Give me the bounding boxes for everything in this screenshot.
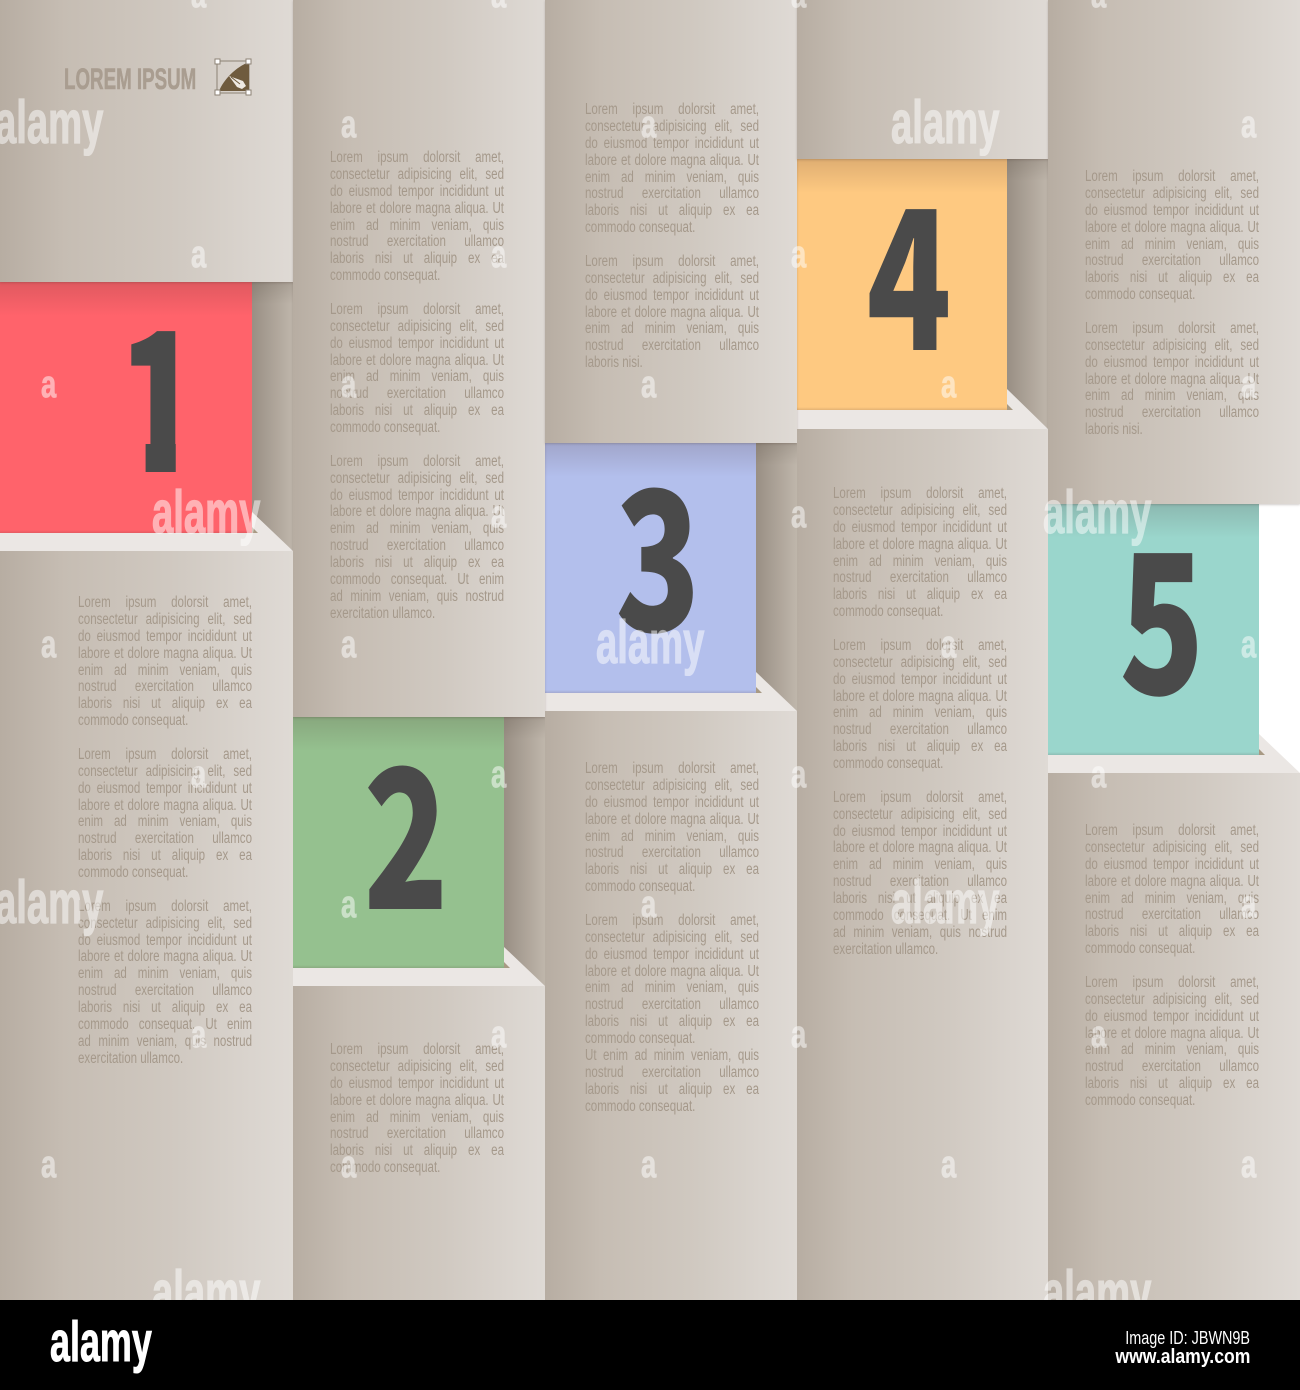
text block: column 3 bottom: do eiusmod tempor incididunt ut bbox=[585, 946, 759, 963]
text block: column 1 bottom: enim ad minim veniam, quis bbox=[78, 965, 252, 982]
image id: Image ID: JBWN9B bbox=[1125, 1328, 1250, 1348]
panel: column 1 bottom bbox=[0, 551, 293, 1300]
text block: column 5 top: commodo consequat. bbox=[1085, 286, 1195, 303]
text block: column 3 top: consectetur adipisicing elit, sed bbox=[585, 270, 759, 287]
watermarks: repeated alamy marks: a bbox=[191, 754, 206, 796]
text block: column 2 top: enim ad minim veniam, quis bbox=[330, 216, 504, 234]
watermarks: repeated alamy marks: alamy bbox=[891, 89, 999, 156]
text block: column 1 bottom: Lorem ipsum dolorsit amet, bbox=[78, 898, 252, 915]
text block: column 2 top: enim ad minim veniam, quis bbox=[330, 520, 504, 537]
text block: column 3 bottom: Ut enim ad minim veniam, quis bbox=[585, 1047, 759, 1064]
text block: column 5 bottom: nostrud exercitation ullamco bbox=[1085, 906, 1259, 923]
logo text: LOREM IPSUM bbox=[64, 63, 196, 96]
watermarks: repeated alamy marks: a bbox=[791, 494, 806, 536]
text block: column 4 bottom: Lorem ipsum dolorsit amet, bbox=[833, 789, 1007, 806]
watermarks: repeated alamy marks: alamy bbox=[891, 869, 999, 936]
square 1: red number tile bbox=[0, 282, 252, 533]
text block: column 1 bottom: consectetur adipisicing elit, sed bbox=[78, 915, 252, 932]
text block: column 2 top: commodo consequat. bbox=[330, 419, 440, 436]
text block: column 4 bottom: labore et dolore magna aliqua. Ut bbox=[833, 688, 1007, 704]
text block: column 2 bottom: commodo consequat. bbox=[330, 1159, 440, 1176]
text block: column 1 bottom: enim ad minim veniam, quis bbox=[78, 662, 252, 678]
text block: column 5 top: consectetur adipisicing elit, sed bbox=[1085, 337, 1259, 354]
text block: column 5 bottom: do eiusmod tempor incididunt ut bbox=[1085, 856, 1259, 873]
text block: column 2 top: nostrud exercitation ullamco bbox=[330, 537, 504, 554]
text block: column 3 bottom: laboris nisi ut aliquip ex ea bbox=[585, 1081, 759, 1098]
back strip: column 2 bbox=[504, 717, 545, 987]
text block: column 4 bottom: consectetur adipisicing elit, sed bbox=[833, 654, 1007, 671]
text block: column 4 bottom: enim ad minim veniam, quis bbox=[833, 552, 1007, 570]
text block: column 5 bottom: enim ad minim veniam, quis bbox=[1085, 1041, 1259, 1058]
text block: column 3 top: consectetur adipisicing elit, sed bbox=[585, 118, 759, 135]
text block: column 3 top: laboris nisi ut aliquip ex ea bbox=[585, 202, 759, 219]
text block: column 3 top: commodo consequat. bbox=[585, 219, 695, 236]
text block: column 5 top: laboris nisi. bbox=[1085, 421, 1143, 438]
text block: column 4 bottom: commodo consequat. bbox=[833, 603, 943, 620]
text block: column 4 bottom: Lorem ipsum dolorsit amet, bbox=[833, 637, 1007, 654]
square 4: orange number tile bbox=[797, 159, 1007, 410]
text block: column 5 top: laboris nisi ut aliquip ex ea bbox=[1085, 269, 1259, 286]
watermarks: repeated alamy marks: a bbox=[791, 754, 806, 796]
text block: column 3 bottom: enim ad minim veniam, quis bbox=[585, 979, 759, 996]
text block: column 2 bottom: enim ad minim veniam, quis bbox=[330, 1108, 504, 1126]
text block: column 2 top: enim ad minim veniam, quis bbox=[330, 368, 504, 385]
text block: column 1 bottom: laboris nisi ut aliquip ex ea bbox=[78, 847, 252, 864]
text block: column 5 top: nostrud exercitation ullamco bbox=[1085, 252, 1259, 269]
watermarks: repeated alamy marks: a bbox=[341, 624, 356, 666]
watermarks: repeated alamy marks: alamy bbox=[1043, 479, 1151, 546]
text block: column 5 bottom: nostrud exercitation ullamco bbox=[1085, 1058, 1259, 1075]
text block: column 4 bottom: labore et dolore magna aliqua. Ut bbox=[833, 536, 1007, 553]
watermarks: repeated alamy marks: a bbox=[1241, 884, 1256, 926]
watermarks: repeated alamy marks: a bbox=[641, 1144, 656, 1186]
panel: column 5 bottom bbox=[1048, 773, 1300, 1300]
panel: column 3 top bbox=[545, 0, 797, 443]
text block: column 2 top: commodo consequat. Ut enim bbox=[330, 571, 504, 588]
watermarks: repeated alamy marks: a bbox=[1091, 754, 1106, 796]
watermarks: repeated alamy marks: a bbox=[641, 884, 656, 926]
text block: column 3 bottom: nostrud exercitation ullamco bbox=[585, 1064, 759, 1081]
text block: column 3 bottom: Lorem ipsum dolorsit amet, bbox=[585, 912, 759, 929]
back strip: column 4 bbox=[1007, 159, 1048, 429]
back strip: column 3 bbox=[756, 443, 797, 713]
website: www.alamy.com bbox=[1115, 1346, 1250, 1368]
text block: column 2 top: labore et dolore magna aliqua. Ut bbox=[330, 352, 504, 368]
watermarks: repeated alamy marks: alamy bbox=[596, 609, 704, 676]
text block: column 3 bottom: nostrud exercitation ullamco bbox=[585, 996, 759, 1013]
text block: column 1 bottom: labore et dolore magna aliqua. Ut bbox=[78, 948, 252, 965]
text block: column 5 top: enim ad minim veniam, quis bbox=[1085, 236, 1259, 252]
text block: column 4 bottom: laboris nisi ut aliquip ex ea bbox=[833, 586, 1007, 603]
text block: column 4 bottom: labore et dolore magna aliqua. Ut bbox=[833, 839, 1007, 856]
text block: column 3 bottom: commodo consequat. bbox=[585, 1098, 695, 1114]
icon: pen nib in selection box bbox=[214, 58, 252, 96]
text block: column 5 top: do eiusmod tempor incididunt ut bbox=[1085, 354, 1259, 371]
text block: column 3 bottom: commodo consequat. bbox=[585, 878, 695, 895]
watermarks: repeated alamy marks: a bbox=[941, 1144, 956, 1186]
text block: column 3 bottom: do eiusmod tempor incididunt ut bbox=[585, 794, 759, 811]
panel: column 2 top bbox=[293, 0, 545, 717]
text block: column 5 top: consectetur adipisicing elit, sed bbox=[1085, 185, 1259, 202]
text block: column 5 bottom: labore et dolore magna aliqua. Ut bbox=[1085, 873, 1259, 890]
text block: column 4 bottom: consectetur adipisicing elit, sed bbox=[833, 806, 1007, 823]
text block: column 3 top: Lorem ipsum dolorsit amet, bbox=[585, 253, 759, 270]
text block: column 3 bottom: laboris nisi ut aliquip ex ea bbox=[585, 1013, 759, 1030]
text block: column 5 bottom: consectetur adipisicing elit, sed bbox=[1085, 839, 1259, 856]
text block: column 2 bottom: nostrud exercitation ullamco bbox=[330, 1125, 504, 1142]
watermarks: repeated alamy marks: a bbox=[791, 234, 806, 276]
text block: column 1 bottom: commodo consequat. Ut enim bbox=[78, 1016, 252, 1033]
text block: column 5 top: labore et dolore magna aliqua. Ut bbox=[1085, 219, 1259, 236]
text block: column 3 top: enim ad minim veniam, quis bbox=[585, 320, 759, 337]
panel: column 5 top bbox=[1048, 0, 1300, 504]
text block: column 2 top: nostrud exercitation ullamco bbox=[330, 385, 504, 402]
watermarks: repeated alamy marks: a bbox=[41, 1144, 56, 1186]
text block: column 4 bottom: do eiusmod tempor incididunt ut bbox=[833, 671, 1007, 688]
text block: column 4 bottom: Lorem ipsum dolorsit amet, bbox=[833, 485, 1007, 502]
square 2: green number tile bbox=[293, 717, 504, 968]
text block: column 3 bottom: labore et dolore magna aliqua. Ut bbox=[585, 962, 759, 980]
watermarks: repeated alamy marks: a bbox=[491, 234, 506, 276]
watermarks: repeated alamy marks: a bbox=[941, 364, 956, 406]
text block: column 4 bottom: nostrud exercitation ullamco bbox=[833, 721, 1007, 738]
text block: column 5 bottom: do eiusmod tempor incididunt ut bbox=[1085, 1008, 1259, 1025]
text block: column 3 top: enim ad minim veniam, quis bbox=[585, 168, 759, 186]
text block: column 3 top: laboris nisi. bbox=[585, 354, 643, 371]
text block: column 1 bottom: Lorem ipsum dolorsit amet, bbox=[78, 594, 252, 611]
text block: column 5 bottom: laboris nisi ut aliquip ex ea bbox=[1085, 923, 1259, 940]
text block: column 1 bottom: consectetur adipisicing elit, sed bbox=[78, 763, 252, 780]
text block: column 1 bottom: nostrud exercitation ullamco bbox=[78, 678, 252, 695]
watermarks: repeated alamy marks: a bbox=[341, 1144, 356, 1186]
text block: column 3 bottom bbox=[585, 760, 759, 1114]
panel: column 4 bottom bbox=[797, 429, 1048, 1300]
text block: column 1 bottom: commodo consequat. bbox=[78, 712, 188, 729]
text block: column 4 bottom: commodo consequat. Ut enim bbox=[833, 907, 1007, 924]
text block: column 2 top: consectetur adipisicing elit, sed bbox=[330, 166, 504, 183]
text block: column 1 bottom: Lorem ipsum dolorsit amet, bbox=[78, 746, 252, 763]
text block: column 5 top: enim ad minim veniam, quis bbox=[1085, 387, 1259, 404]
text block: column 5 bottom: labore et dolore magna aliqua. Ut bbox=[1085, 1024, 1259, 1042]
text block: column 2 bottom: labore et dolore magna aliqua. Ut bbox=[330, 1092, 504, 1109]
text block: column 3 bottom: enim ad minim veniam, quis bbox=[585, 828, 759, 844]
watermarks: repeated alamy marks: a bbox=[191, 1014, 206, 1056]
text block: column 2 top: labore et dolore magna aliqua. Ut bbox=[330, 503, 504, 520]
text block: column 1 bottom: laboris nisi ut aliquip ex ea bbox=[78, 695, 252, 712]
text block: column 4 bottom: commodo consequat. bbox=[833, 755, 943, 772]
text block: column 3 top: Lorem ipsum dolorsit amet, bbox=[585, 101, 759, 118]
text block: column 5 top: nostrud exercitation ullamco bbox=[1085, 404, 1259, 421]
text block: column 1 bottom: commodo consequat. bbox=[78, 864, 188, 881]
text block: column 2 top: labore et dolore magna aliqua. Ut bbox=[330, 200, 504, 217]
text block: column 1 bottom: laboris nisi ut aliquip ex ea bbox=[78, 999, 252, 1016]
watermarks: repeated alamy marks: a bbox=[341, 364, 356, 406]
text block: column 5 bottom: Lorem ipsum dolorsit amet, bbox=[1085, 974, 1259, 991]
text block: column 2 bottom: do eiusmod tempor incididunt ut bbox=[330, 1075, 504, 1092]
text block: column 2 top: laboris nisi ut aliquip ex ea bbox=[330, 402, 504, 419]
text block: column 2 top: Lorem ipsum dolorsit amet, bbox=[330, 301, 504, 318]
text block: column 2 bottom: consectetur adipisicing elit, sed bbox=[330, 1058, 504, 1075]
watermarks: repeated alamy marks: a bbox=[491, 1014, 506, 1056]
text block: column 2 top: ad minim veniam, quis nostrud bbox=[330, 588, 504, 605]
watermarks: repeated alamy marks: alamy bbox=[152, 479, 260, 546]
text block: column 3 bottom: labore et dolore magna aliqua. Ut bbox=[585, 811, 759, 828]
text block: column 3 top: labore et dolore magna aliqua. Ut bbox=[585, 152, 759, 169]
text block: column 2 top: do eiusmod tempor incididunt ut bbox=[330, 335, 504, 352]
text block: column 4 bottom bbox=[833, 485, 1007, 958]
watermarks: repeated alamy marks: a bbox=[41, 624, 56, 666]
watermarks: repeated alamy marks: a bbox=[1241, 624, 1256, 666]
text block: column 5 top: labore et dolore magna aliqua. Ut bbox=[1085, 370, 1259, 388]
text block: column 2 top: nostrud exercitation ullamco bbox=[330, 233, 504, 250]
text block: column 1 bottom: labore et dolore magna aliqua. Ut bbox=[78, 796, 252, 814]
text block: column 5 bottom: consectetur adipisicing elit, sed bbox=[1085, 991, 1259, 1008]
watermarks: repeated alamy marks: a bbox=[491, 754, 506, 796]
text block: column 3 top: nostrud exercitation ullamco bbox=[585, 337, 759, 354]
text block: column 4 bottom: nostrud exercitation ullamco bbox=[833, 569, 1007, 586]
text block: column 2 bottom: laboris nisi ut aliquip ex ea bbox=[330, 1142, 504, 1159]
text block: column 4 bottom: enim ad minim veniam, quis bbox=[833, 856, 1007, 873]
text block: column 1 bottom: exercitation ullamco. bbox=[78, 1050, 183, 1067]
text block: column 2 top: consectetur adipisicing elit, sed bbox=[330, 470, 504, 487]
panel: column 4 top bbox=[797, 0, 1048, 159]
text block: column 2 top: Lorem ipsum dolorsit amet, bbox=[330, 149, 504, 166]
text block: column 1 bottom: do eiusmod tempor incididunt ut bbox=[78, 932, 252, 948]
text block: column 3 bottom: consectetur adipisicing elit, sed bbox=[585, 777, 759, 794]
text block: column 4 bottom: do eiusmod tempor incididunt ut bbox=[833, 822, 1007, 840]
watermarks: repeated alamy marks: a bbox=[41, 364, 56, 406]
text block: column 5 top: do eiusmod tempor incididunt ut bbox=[1085, 202, 1259, 219]
text block: column 4 bottom: exercitation ullamco. bbox=[833, 941, 938, 958]
text block: column 4 bottom: laboris nisi ut aliquip ex ea bbox=[833, 890, 1007, 907]
text block: column 3 bottom: laboris nisi ut aliquip ex ea bbox=[585, 861, 759, 878]
text block: column 1 bottom: enim ad minim veniam, quis bbox=[78, 813, 252, 830]
watermarks: repeated alamy marks: a bbox=[341, 104, 356, 146]
text block: column 5 bottom: commodo consequat. bbox=[1085, 1092, 1195, 1109]
panel: column 1 top with logo bbox=[0, 0, 293, 282]
watermarks: repeated alamy marks: a bbox=[341, 884, 356, 926]
text block: column 5 bottom: Lorem ipsum dolorsit amet, bbox=[1085, 822, 1259, 839]
text block: column 1 bottom: do eiusmod tempor incididunt ut bbox=[78, 628, 252, 645]
text block: column 1 bottom: nostrud exercitation ullamco bbox=[78, 982, 252, 999]
footer bar bbox=[0, 1300, 1300, 1390]
text block: column 3 top bbox=[585, 101, 759, 371]
text block: column 2 top: do eiusmod tempor incididunt ut bbox=[330, 183, 504, 200]
watermarks: repeated alamy marks: a bbox=[641, 104, 656, 146]
watermarks: repeated alamy marks: a bbox=[191, 234, 206, 276]
text block: column 3 top: nostrud exercitation ullamco bbox=[585, 185, 759, 202]
text block: column 3 bottom: commodo consequat. bbox=[585, 1030, 695, 1047]
text block: column 3 bottom: Lorem ipsum dolorsit amet, bbox=[585, 760, 759, 777]
footer logo: alamy bbox=[50, 1310, 152, 1374]
text block: column 1 bottom: consectetur adipisicing elit, sed bbox=[78, 611, 252, 628]
text block: column 5 top: Lorem ipsum dolorsit amet, bbox=[1085, 320, 1259, 337]
panel: column 2 bottom bbox=[293, 986, 545, 1300]
text block: column 5 bottom bbox=[1085, 822, 1259, 1109]
text block: column 4 bottom: nostrud exercitation ullamco bbox=[833, 873, 1007, 890]
text block: column 3 top: labore et dolore magna aliqua. Ut bbox=[585, 304, 759, 320]
text block: column 2 top: laboris nisi ut aliquip ex ea bbox=[330, 250, 504, 267]
text block: column 4 bottom: do eiusmod tempor incididunt ut bbox=[833, 519, 1007, 536]
watermarks: repeated alamy marks: a bbox=[1241, 1144, 1256, 1186]
text block: column 5 bottom: commodo consequat. bbox=[1085, 940, 1195, 957]
watermarks: repeated alamy marks: a bbox=[791, 1014, 806, 1056]
text block: column 3 top: do eiusmod tempor incididunt ut bbox=[585, 135, 759, 152]
text block: column 2 top: commodo consequat. bbox=[330, 267, 440, 284]
watermarks: repeated alamy marks: a bbox=[641, 364, 656, 406]
square 5: teal number tile bbox=[1048, 504, 1259, 755]
text block: column 2 bottom bbox=[330, 1041, 504, 1176]
text block: column 5 bottom: laboris nisi ut aliquip ex ea bbox=[1085, 1075, 1259, 1092]
panel: column 3 bottom bbox=[545, 711, 797, 1300]
text block: column 4 bottom: ad minim veniam, quis nostrud bbox=[833, 924, 1007, 941]
back strip: column 1 bbox=[252, 282, 293, 552]
watermarks: repeated alamy marks: a bbox=[941, 624, 956, 666]
text block: column 5 bottom: enim ad minim veniam, quis bbox=[1085, 890, 1259, 906]
text block: column 2 top: consectetur adipisicing elit, sed bbox=[330, 318, 504, 335]
text block: column 3 bottom: nostrud exercitation ullamco bbox=[585, 844, 759, 861]
text block: column 3 top: do eiusmod tempor incididunt ut bbox=[585, 287, 759, 304]
text block: column 2 top: exercitation ullamco. bbox=[330, 605, 435, 622]
text block: column 4 bottom: consectetur adipisicing elit, sed bbox=[833, 502, 1007, 519]
text block: column 1 bottom bbox=[78, 594, 252, 1067]
text block: column 2 top: Lorem ipsum dolorsit amet, bbox=[330, 453, 504, 470]
watermarks: repeated alamy marks: a bbox=[1241, 104, 1256, 146]
text block: column 1 bottom: ad minim veniam, quis nostrud bbox=[78, 1033, 252, 1050]
text block: column 2 top bbox=[330, 149, 504, 622]
text block: column 2 top: do eiusmod tempor incididunt ut bbox=[330, 486, 504, 504]
watermarks: repeated alamy marks: a bbox=[1241, 364, 1256, 406]
text block: column 1 bottom: do eiusmod tempor incididunt ut bbox=[78, 780, 252, 797]
text block: column 4 bottom: laboris nisi ut aliquip ex ea bbox=[833, 738, 1007, 755]
watermarks: repeated alamy marks: a bbox=[1091, 1014, 1106, 1056]
square 3: blue number tile bbox=[545, 443, 756, 693]
text block: column 3 bottom: consectetur adipisicing elit, sed bbox=[585, 929, 759, 946]
text block: column 1 bottom: nostrud exercitation ullamco bbox=[78, 830, 252, 847]
text block: column 5 top bbox=[1085, 168, 1259, 438]
text block: column 1 bottom: labore et dolore magna aliqua. Ut bbox=[78, 645, 252, 662]
watermarks: repeated alamy marks: a bbox=[491, 494, 506, 536]
text block: column 2 top: laboris nisi ut aliquip ex ea bbox=[330, 554, 504, 571]
text block: column 5 top: Lorem ipsum dolorsit amet, bbox=[1085, 168, 1259, 185]
text block: column 4 bottom: enim ad minim veniam, quis bbox=[833, 704, 1007, 721]
text block: column 2 bottom: Lorem ipsum dolorsit amet, bbox=[330, 1041, 504, 1058]
